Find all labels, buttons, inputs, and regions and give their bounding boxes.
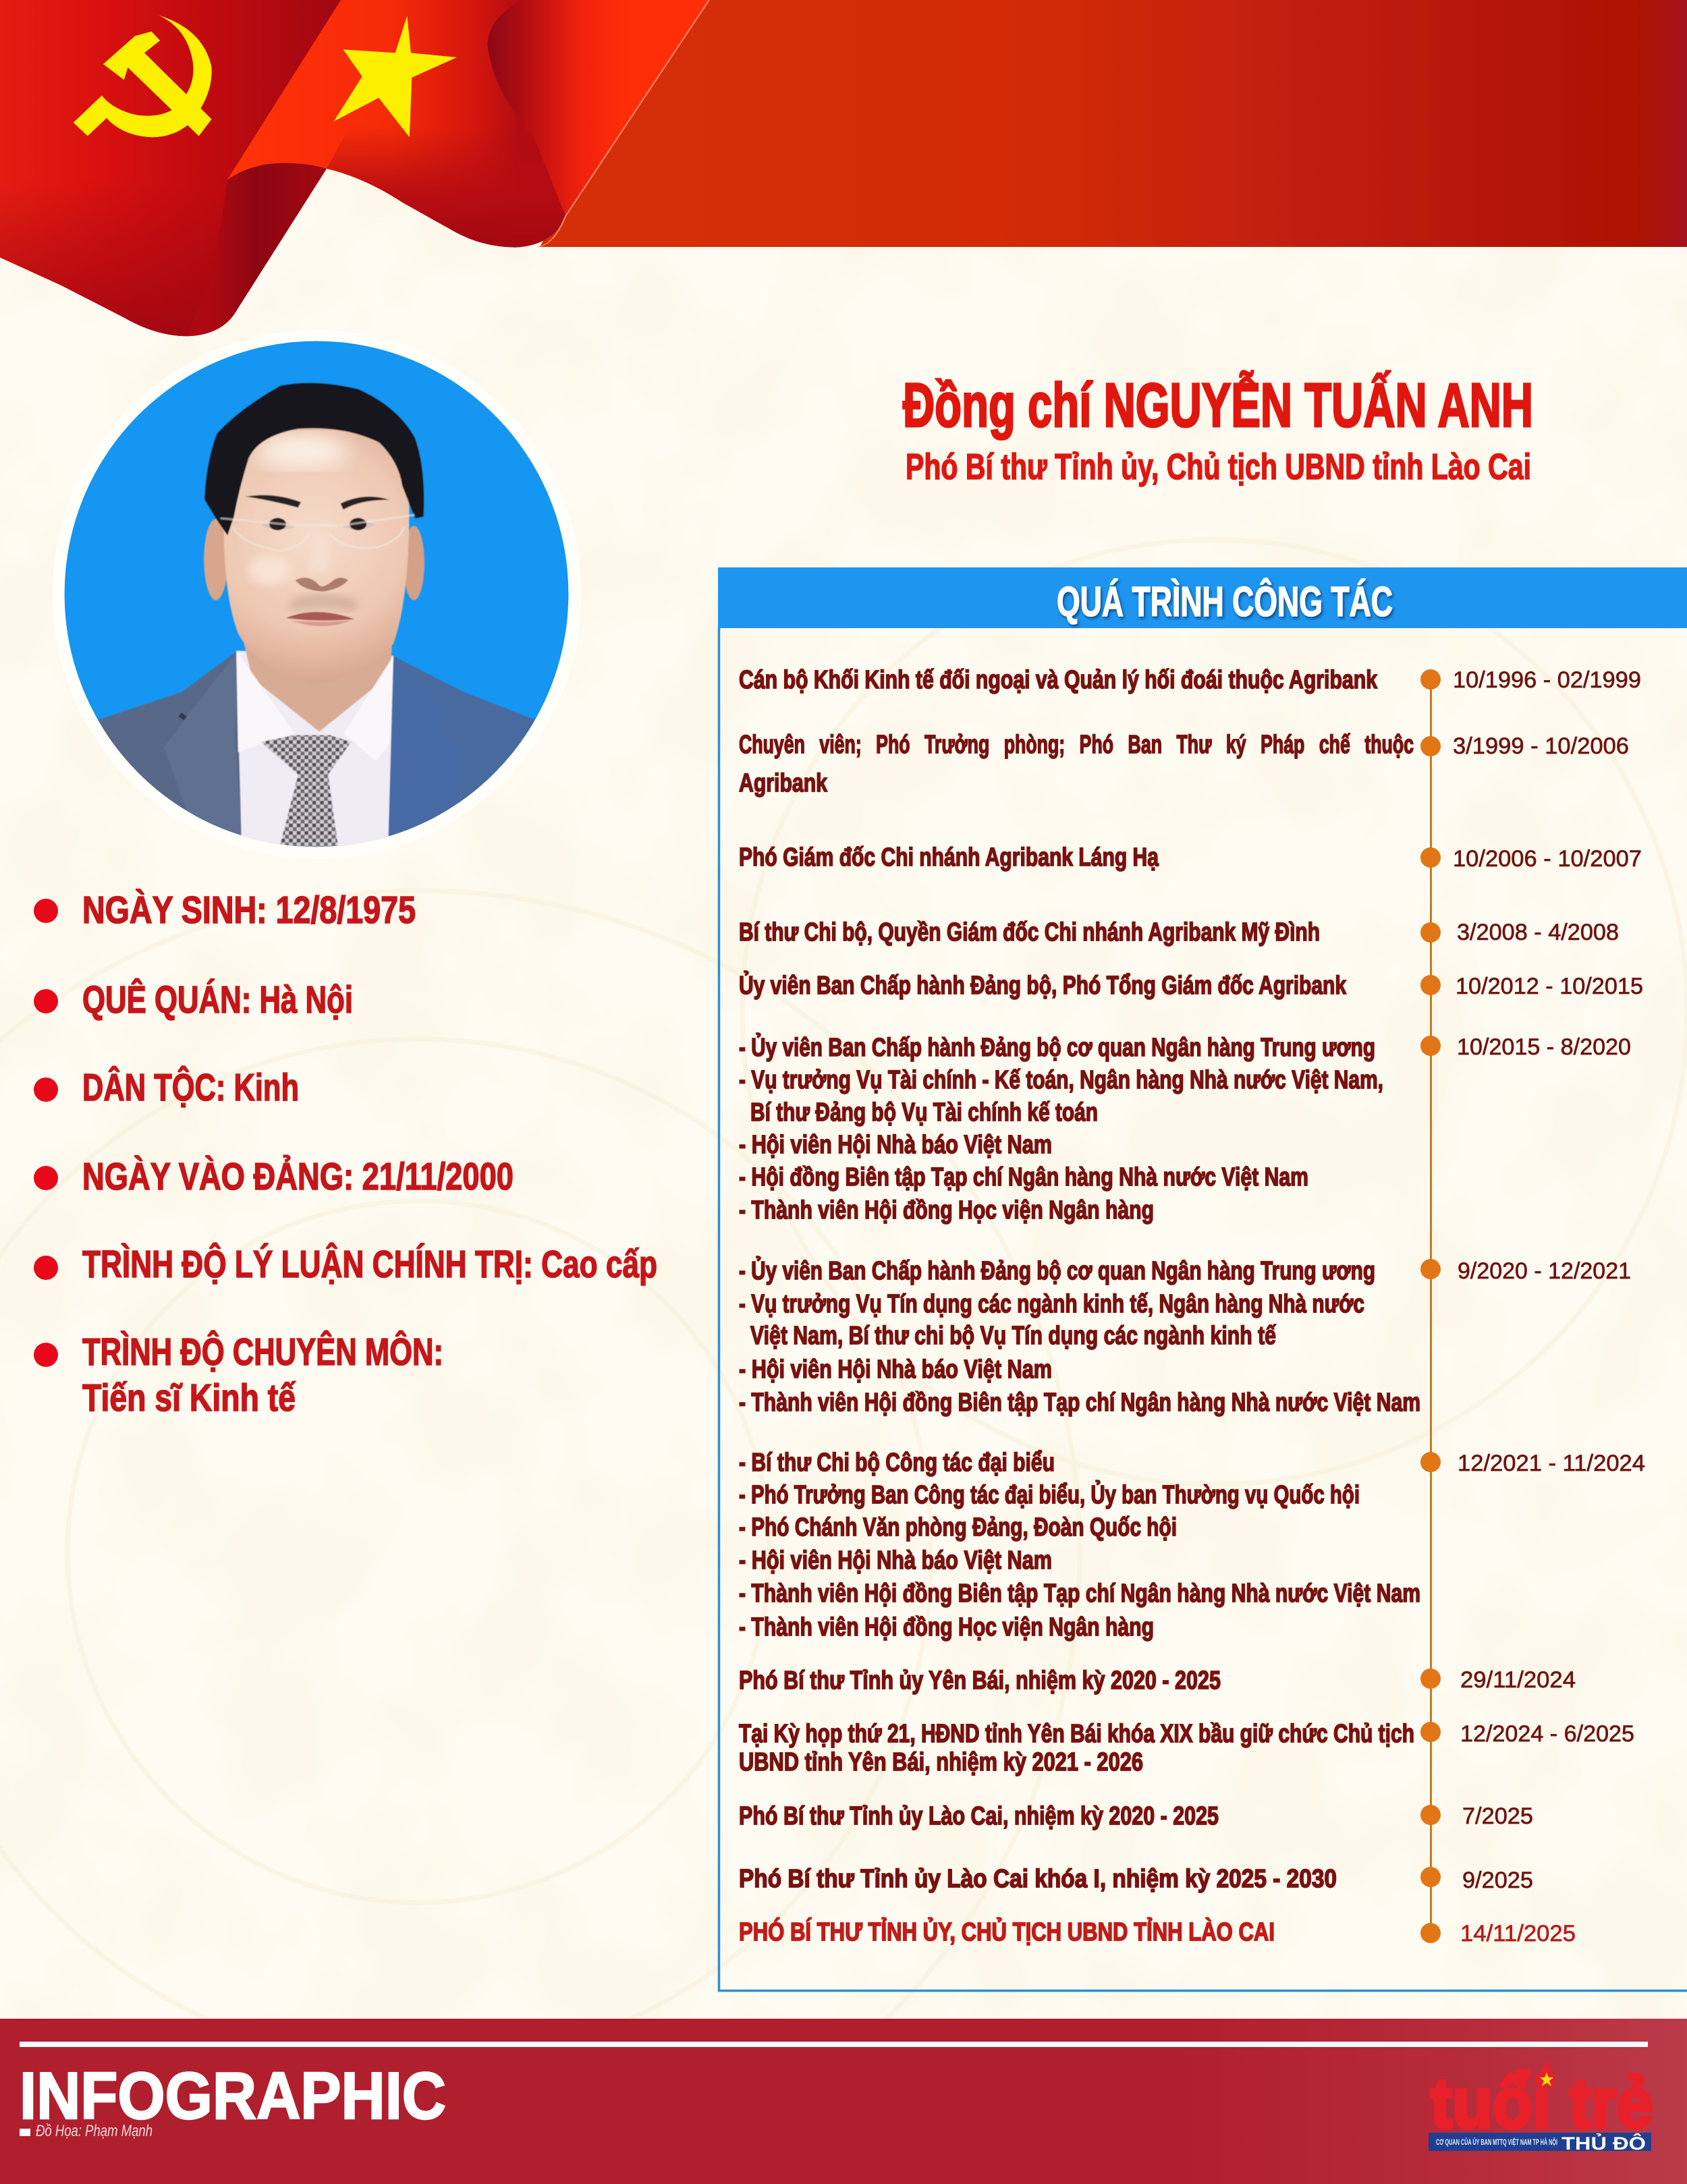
suit right [379, 654, 570, 850]
timeline row 29/11/2024: Phó Bí thư Tỉnh ủy Yên Bái, nhiệm kỳ 2020 - 2025 [739, 1667, 1221, 1695]
flag: national flag panel [227, 0, 710, 248]
timeline row 3/2008: Bí thư Chi bộ, Quyền Giám đốc Chi nhánh Agribank Mỹ Đình [739, 918, 1320, 947]
waving flags [0, 0, 710, 336]
collar [236, 650, 393, 761]
timeline row 3/1999: Chuyên viên; Phó Trưởng phòng; Phó Ban Thư ký Pháp chế thuộc [739, 731, 1414, 759]
flag: bright edge [537, 0, 709, 247]
timeline row 10/2015 [739, 1032, 1631, 1225]
party join date: NGÀY VÀO ĐẢNG: 21/11/2000 [82, 1154, 514, 1198]
hair [204, 383, 424, 536]
neck [240, 627, 393, 731]
suit left [98, 649, 242, 833]
hometown: QUÊ QUÁN: Hà Nội [82, 978, 353, 1021]
timeline row 9/2020: - Hội viên Hội Nhà báo Việt Nam [739, 1355, 1052, 1384]
icon: hammer and sickle [74, 16, 212, 137]
logo wordmark: tuổi trẻ [1431, 2064, 1653, 2143]
timeline row 10/2015: - Vụ trưởng Vụ Tài chính - Kế toán, Ngân hàng Nhà nước Việt Nam, [739, 1066, 1383, 1094]
timeline row 12/2024: Tại Kỳ họp thứ 21, HĐND tỉnh Yên Bái khóa XIX bầu giữ chức Chủ tịch [739, 1720, 1414, 1748]
timeline row 10/2006: 10/2006 - 10/2007 [1453, 846, 1642, 872]
panel header bar [718, 567, 1687, 628]
infographic wordmark: INFOGRAPHIC [20, 2059, 446, 2133]
timeline row 10/1996: 10/1996 - 02/1999 [1453, 667, 1641, 693]
political theory level: TRÌNH ĐỘ LÝ LUẬN CHÍNH TRỊ: Cao cấp [82, 1242, 657, 1286]
birth date: NGÀY SINH: 12/8/1975 [82, 889, 416, 932]
flag: party flag panel [0, 0, 341, 336]
footer [0, 2019, 1687, 2184]
logo star [1540, 2073, 1553, 2086]
face [224, 427, 410, 683]
irises [269, 518, 286, 530]
timeline row 9/2020: Việt Nam, Bí thư chi bộ Vụ Tín dụng các ngành kinh tế [750, 1322, 1277, 1350]
nostrils [296, 578, 348, 592]
glasses [221, 515, 414, 551]
bullet [34, 1166, 58, 1190]
eye whites [261, 521, 375, 530]
logo flame [1539, 2061, 1554, 2088]
lower lip [291, 621, 351, 626]
shirt [236, 650, 393, 847]
nose bridge highlight [308, 537, 330, 571]
portrait white ring [53, 330, 582, 859]
timeline row 7/2025: 7/2025 [1462, 1803, 1533, 1829]
logo: Tuổi Trẻ [1429, 2061, 1653, 2154]
credit marker [20, 2129, 30, 2136]
eyebrows [245, 495, 390, 509]
timeline row 12/2024: UBND tỉnh Yên Bái, nhiệm kỳ 2021 - 2026 [739, 1748, 1143, 1776]
timeline row 3/1999: Agribank [739, 769, 828, 797]
timeline row 7/2025: Phó Bí thư Tỉnh ủy Lào Cai, nhiệm kỳ 2020 - 2025 [739, 1802, 1219, 1830]
bullet [34, 989, 58, 1013]
timeline row 10/1996: Cán bộ Khối Kinh tế đối ngoại và Quản lý hối đoái thuộc Agribank [739, 666, 1378, 694]
timeline row 12/2021: - Phó Chánh Văn phòng Đảng, Đoàn Quốc hội [739, 1513, 1177, 1542]
portrait photo [65, 341, 568, 847]
forehead highlight [256, 434, 348, 468]
upper lip [285, 612, 354, 621]
bullet [34, 899, 58, 923]
timeline row 3/1999 [739, 731, 1629, 797]
portrait [40, 324, 594, 864]
timeline row 12/2021: - Hội viên Hội Nhà báo Việt Nam [739, 1546, 1052, 1575]
ears [204, 519, 228, 600]
right lapel [381, 656, 464, 838]
lapel notch [178, 712, 187, 721]
timeline row 12/2021: - Thành viên Hội đồng Biên tập Tạp chí Ngân hàng Nhà nước Việt Nam [739, 1579, 1420, 1608]
timeline row 10/2012: Ủy viên Ban Chấp hành Đảng bộ, Phó Tổng Giám đốc Agribank [739, 970, 1347, 1000]
timeline row 9/2025: 9/2025 [1462, 1868, 1533, 1893]
timeline row 12/2021: - Thành viên Hội đồng Học viện Ngân hàng [739, 1613, 1154, 1642]
professional level value: Tiến sĩ Kinh tế [82, 1376, 296, 1420]
timeline row 10/2012: 10/2012 - 10/2015 [1456, 974, 1643, 999]
timeline row 10/2006 [739, 843, 1642, 872]
timeline row 10/2006: Phó Giám đốc Chi nhánh Agribank Láng Hạ [739, 843, 1159, 872]
timeline row 10/2015: - Ủy viên Ban Chấp hành Đảng bộ cơ quan Ngân hàng Trung ương [739, 1032, 1375, 1062]
timeline row 10/2015: - Thành viên Hội đồng Học viện Ngân hàng [739, 1196, 1154, 1225]
footer white rule [20, 2042, 1648, 2047]
flag: national flag lower shading [327, 113, 565, 248]
panel: work history [718, 567, 1687, 1990]
timeline row 10/2015: - Hội đồng Biên tập Tạp chí Ngân hàng Nhà nước Việt Nam [739, 1163, 1308, 1192]
graphics credit: Đồ Họa: Phạm Mạnh [36, 2122, 153, 2140]
stubble shadow [291, 594, 358, 611]
timeline row 14/11/2025: 14/11/2025 [1460, 1921, 1576, 1947]
timeline row 9/2020: - Vụ trưởng Vụ Tín dụng các ngành kinh tế, Ngân hàng Nhà nước [739, 1290, 1364, 1318]
timeline row 12/2021: - Bí thư Chi bộ Công tác đại biểu [739, 1449, 1055, 1477]
timeline row 9/2020: - Thành viên Hội đồng Biên tập Tạp chí Ngân hàng Nhà nước Việt Nam [739, 1389, 1420, 1417]
panel heading: QUÁ TRÌNH CÔNG TÁC [1057, 579, 1393, 625]
logo blue bar [1429, 2133, 1651, 2151]
timeline row 29/11/2024: 29/11/2024 [1460, 1667, 1576, 1693]
timeline row 3/2008: 3/2008 - 4/2008 [1457, 920, 1619, 945]
timeline row 12/2024: 12/2024 - 6/2025 [1460, 1721, 1634, 1747]
timeline row 10/2015: - Hội viên Hội Nhà báo Việt Nam [739, 1131, 1052, 1159]
timeline row 9/2020 [739, 1256, 1631, 1417]
cheek highlight [249, 555, 291, 586]
footer band [0, 2019, 1687, 2184]
timeline row 12/2021: - Phó Trưởng Ban Công tác đại biểu, Ủy ban Thường vụ Quốc hội [739, 1480, 1360, 1509]
timeline row 10/2015: Bí thư Đảng bộ Vụ Tài chính kế toán [750, 1098, 1098, 1127]
timeline row 9/2020: 9/2020 - 12/2021 [1458, 1258, 1631, 1284]
professional level: TRÌNH ĐỘ CHUYÊN MÔN: [82, 1330, 443, 1374]
header red band [540, 0, 1687, 247]
bullet [34, 1077, 58, 1102]
timeline row 12/2021 [739, 1449, 1645, 1642]
bullet [34, 1343, 58, 1367]
timeline row 12/2024 [739, 1720, 1634, 1776]
logo Thủ Đô: THỦ ĐÔ [1561, 2132, 1646, 2154]
icon: yellow star [334, 16, 457, 137]
bullet [34, 1256, 58, 1280]
personal information list [34, 889, 657, 1420]
ethnicity: DÂN TỘC: Kinh [82, 1065, 299, 1109]
lapels [164, 649, 242, 837]
timeline row 12/2021: 12/2021 - 11/2024 [1458, 1451, 1645, 1476]
flag: left fold [187, 163, 327, 336]
panel frame [719, 627, 1687, 1990]
timeline row 9/2020: - Ủy viên Ban Chấp hành Đảng bộ cơ quan Ngân hàng Trung ương [739, 1256, 1375, 1285]
timeline row 14/11/2025: PHÓ BÍ THƯ TỈNH ỦY, CHỦ TỊCH UBND TỈNH LÀO CAI [739, 1917, 1275, 1947]
flag: right curl [488, 0, 710, 216]
timeline row 10/2015: 10/2015 - 8/2020 [1457, 1034, 1631, 1060]
flag: party flag lower shading [0, 180, 279, 336]
timeline row 9/2025: Phó Bí thư Tỉnh ủy Lào Cai khóa I, nhiệm kỳ 2025 - 2030 [739, 1865, 1337, 1893]
timeline row 3/1999: 3/1999 - 10/2006 [1453, 733, 1629, 759]
tie [261, 735, 351, 850]
person [98, 382, 535, 847]
logo small caption: CƠ QUAN CỦA ỦY BAN MTTQ VIỆT NAM TP HÀ NỘI [1436, 2137, 1557, 2147]
timeline line [1430, 679, 1432, 1933]
